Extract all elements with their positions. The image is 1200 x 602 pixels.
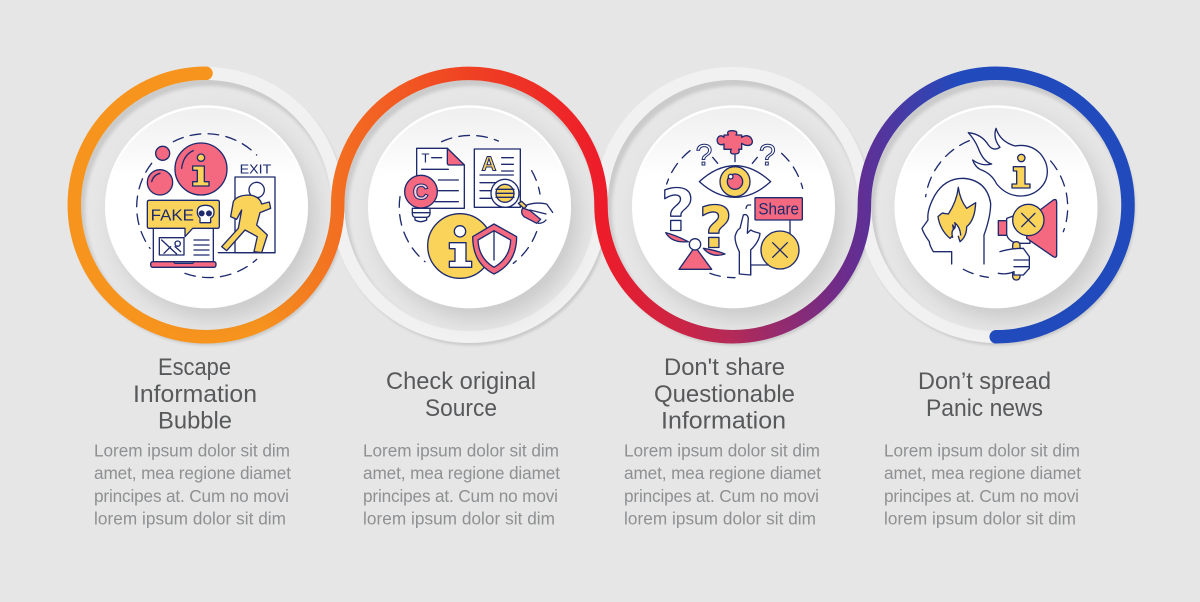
icon: check original source bbox=[399, 135, 553, 278]
step 3 body: amet, mea regione diamet bbox=[624, 463, 821, 483]
step 1 body: principes at. Cum no movi bbox=[94, 486, 289, 506]
step 1 body bbox=[94, 440, 291, 528]
step 3 body bbox=[624, 440, 821, 528]
gradient loop line bbox=[74, 73, 1128, 337]
step 2 body: lorem ipsum dolor sit dim bbox=[363, 508, 555, 528]
step 1 title: Information bbox=[133, 381, 257, 408]
step 4 body: amet, mea regione diamet bbox=[884, 463, 1081, 483]
step 3 body: lorem ipsum dolor sit dim bbox=[624, 508, 816, 528]
icon: do not share questionable information: ? bbox=[661, 177, 695, 245]
step 3 title: Questionable bbox=[654, 381, 795, 408]
pale ring: step 2 bbox=[331, 67, 609, 346]
step 2 body: amet, mea regione diamet bbox=[363, 463, 560, 483]
icon: check original source: T bbox=[421, 151, 429, 166]
white disk: step 4 bbox=[894, 105, 1098, 308]
step 3 title: Don't share bbox=[664, 354, 785, 381]
step 4 body: lorem ipsum dolor sit dim bbox=[884, 508, 1076, 528]
icon: escape information bubble: FAKE bbox=[151, 208, 194, 225]
step 2 body: principes at. Cum no movi bbox=[363, 486, 558, 506]
step 4 title: Panic news bbox=[926, 395, 1043, 422]
icon: do not share questionable information bbox=[661, 131, 803, 278]
icon: do not share questionable information: ? bbox=[699, 193, 733, 261]
step 3 body: Lorem ipsum dolor sit dim bbox=[624, 440, 820, 460]
icon: do not share questionable information: Share bbox=[758, 200, 799, 218]
step 2 title bbox=[386, 368, 536, 422]
step 4 body: principes at. Cum no movi bbox=[884, 486, 1079, 506]
pale ring: step 3 bbox=[595, 67, 872, 346]
icon: do not spread panic news bbox=[922, 128, 1068, 280]
step 2 title: Source bbox=[425, 395, 497, 422]
step 1 title: Bubble bbox=[158, 408, 232, 434]
icon: check original source: C bbox=[413, 179, 429, 204]
pale ring: step 4 bbox=[858, 67, 1136, 346]
step 1 body: amet, mea regione diamet bbox=[94, 463, 291, 483]
pale ring: step 1 bbox=[68, 67, 346, 346]
step 4 body: Lorem ipsum dolor sit dim bbox=[884, 440, 1080, 460]
step 1 title bbox=[133, 354, 257, 434]
icon: do not share questionable information: ? bbox=[696, 139, 712, 172]
step 2 title: Check original bbox=[386, 368, 536, 395]
step 4 title bbox=[918, 368, 1051, 422]
step 3 title bbox=[654, 354, 795, 434]
step 1 title: Escape bbox=[158, 354, 231, 381]
icon: escape information bubble bbox=[137, 134, 275, 278]
icon: do not share questionable information: ? bbox=[759, 139, 776, 172]
white disk: step 1 bbox=[105, 105, 308, 308]
icon: check original source: A bbox=[482, 153, 497, 176]
white disk: step 3 bbox=[632, 105, 835, 308]
step 3 title: Information bbox=[661, 408, 786, 434]
step 2 body: Lorem ipsum dolor sit dim bbox=[363, 440, 559, 460]
step 1 body: lorem ipsum dolor sit dim bbox=[94, 508, 286, 528]
step 1 body: Lorem ipsum dolor sit dim bbox=[94, 440, 290, 460]
step 4 title: Don’t spread bbox=[918, 368, 1051, 395]
icon: escape information bubble: EXIT bbox=[240, 161, 271, 176]
white disk: step 2 bbox=[368, 105, 571, 308]
step 4 body bbox=[884, 440, 1081, 528]
step 2 body bbox=[363, 440, 560, 528]
step 3 body: principes at. Cum no movi bbox=[624, 486, 819, 506]
